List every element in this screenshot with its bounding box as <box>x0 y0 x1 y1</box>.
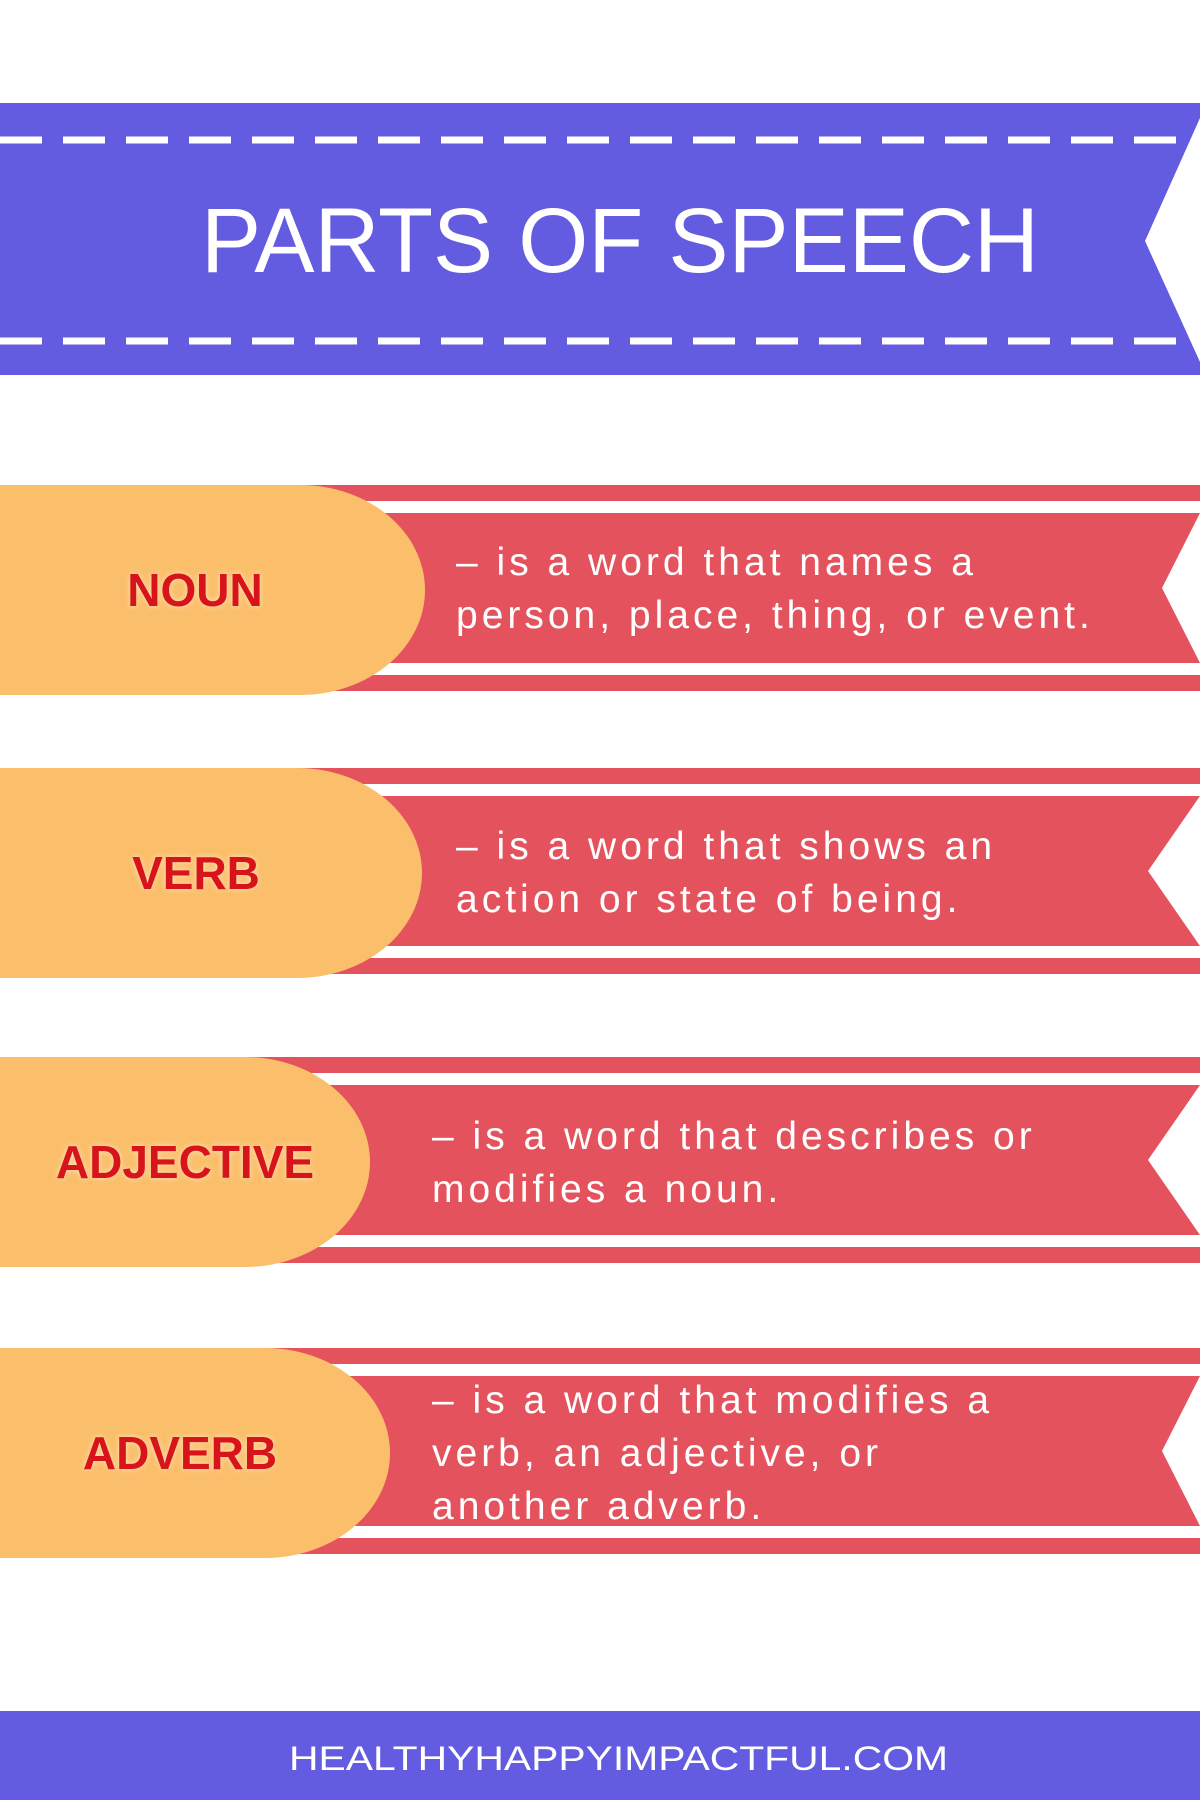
label: adjective <box>0 1057 370 1267</box>
label: noun <box>0 485 425 695</box>
definition: adjective <box>432 1115 1036 1211</box>
definition: noun: person, place, thing, or event. <box>456 594 1094 637</box>
definition: adjective: modifies a noun. <box>432 1168 782 1211</box>
definition: adjective: – is a word that describes or <box>432 1115 1036 1158</box>
row: noun <box>0 485 1200 695</box>
definition: verb <box>456 825 996 921</box>
footer <box>0 1711 1200 1800</box>
label: verb <box>0 768 422 978</box>
definition: verb: action or state of being. <box>456 878 961 921</box>
footer url: HEALTHYHAPPYIMPACTFUL.COM <box>289 1740 948 1778</box>
label: noun: NOUN <box>127 564 263 616</box>
label: verb: VERB <box>132 847 260 899</box>
row: adjective <box>0 1057 1200 1267</box>
definition: adverb: another adverb. <box>432 1485 765 1528</box>
row: adverb <box>0 1348 1200 1558</box>
definition: verb: – is a word that shows an <box>456 825 996 868</box>
definition: adverb: verb, an adjective, or <box>432 1432 882 1475</box>
header banner <box>0 103 1200 375</box>
label: adjective: ADJECTIVE <box>56 1136 314 1188</box>
definition: noun: – is a word that names a <box>456 541 977 584</box>
definition: adverb: – is a word that modifies a <box>432 1379 993 1422</box>
label: adverb: ADVERB <box>83 1427 277 1479</box>
label: adverb <box>0 1348 390 1558</box>
row: verb <box>0 768 1200 978</box>
title: PARTS OF SPEECH <box>201 190 1039 292</box>
definition: adverb <box>432 1379 993 1528</box>
definition: noun <box>456 541 1094 637</box>
